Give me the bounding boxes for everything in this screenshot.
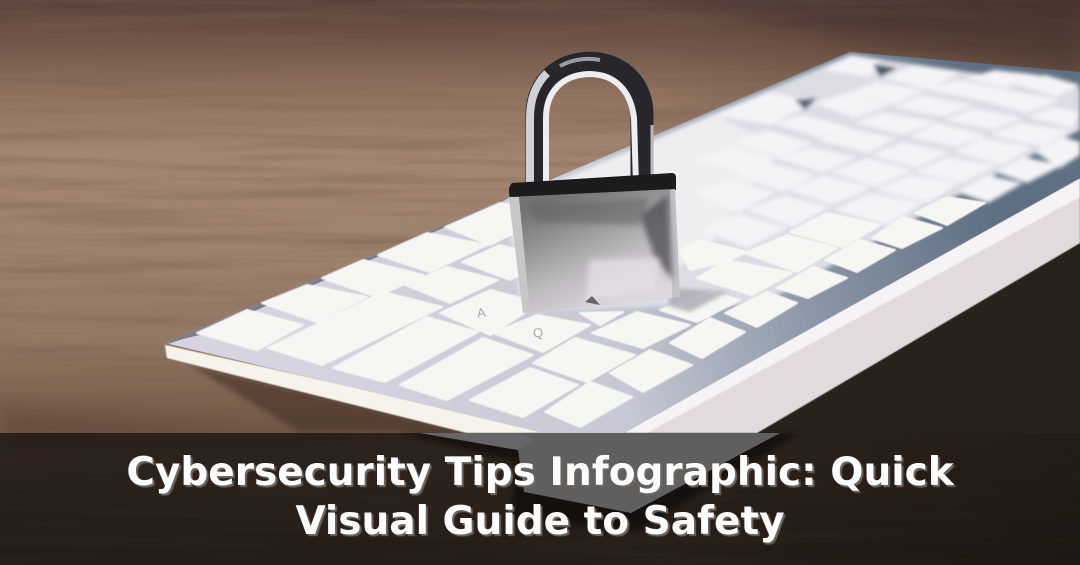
metal shading [509,189,680,313]
lock shadow on keys [668,288,728,312]
keyboard [165,52,1080,530]
shackle [530,59,652,195]
keyboard aluminium top [165,52,1080,433]
far key field [505,55,1080,310]
keyboard front lip [165,178,1080,433]
key legends: A [476,305,487,321]
title: Visual Guide to Safety [295,499,785,544]
title [126,450,956,545]
keyboard foot and shadow [400,433,800,530]
key legends: Q [532,325,544,341]
near keys [197,197,985,427]
lock body [509,189,680,313]
key legends [476,305,544,341]
padlock [509,59,728,313]
dark caption band [0,433,1080,565]
title: Cybersecurity Tips Infographic: Quick [126,450,954,495]
lock top plate [509,173,676,198]
